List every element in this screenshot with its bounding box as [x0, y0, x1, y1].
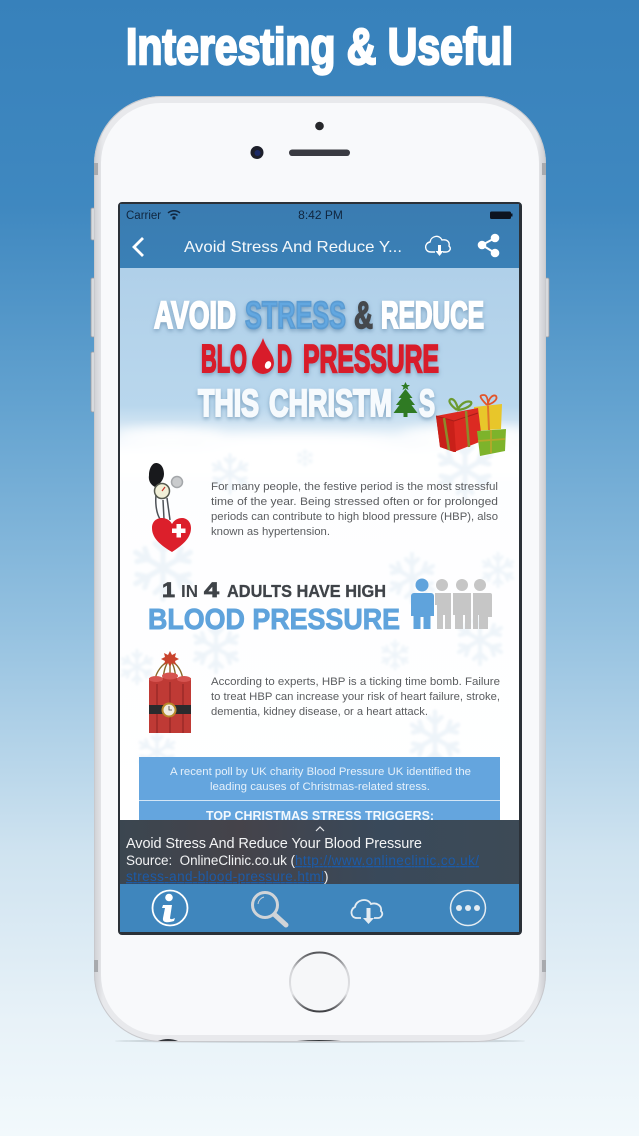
icon: share: [478, 234, 499, 257]
poll description: [170, 766, 471, 793]
home button: [290, 952, 349, 1012]
poll description: A recent poll by UK charity Blood Pressure UK identified the: [170, 766, 471, 778]
panel: stress triggers: [139, 757, 500, 820]
screen: [110, 203, 540, 934]
statistic: blood pressure: BLOOD PRESSURE: [148, 604, 400, 636]
heading: this christmas: S: [419, 383, 435, 425]
navigation title: Avoid Stress And Reduce Y...: [184, 239, 402, 256]
blood drop highlight: [264, 361, 272, 369]
carrier label: Carrier: [126, 210, 161, 222]
second paragraph: dementia, kidney disease, or a heart attack.: [211, 706, 428, 718]
phone: [91, 96, 549, 1043]
intro paragraph: [211, 481, 498, 538]
heading: this christmas: CHRISTM: [269, 383, 392, 425]
icon: info: [152, 890, 188, 926]
heading: blood pressure: BLO: [201, 338, 247, 381]
caption overlay: [120, 820, 519, 884]
intro paragraph: For many people, the festive period is the most stressful: [211, 481, 498, 493]
statistic: 1 in 4 adults: ADULTS HAVE HIGH: [227, 581, 386, 601]
icon: more: [450, 890, 486, 926]
caption title: Avoid Stress And Reduce Your Blood Pressure: [126, 836, 422, 852]
heading: avoid stress and reduce: &: [354, 295, 373, 337]
icon: gift boxes: [436, 395, 506, 456]
heading: this christmas: [196, 388, 437, 422]
caption source: stress-and-blood-pressure.html: [126, 869, 324, 884]
icon: dynamite: [149, 651, 191, 733]
icon: expand chevron: [316, 827, 324, 831]
caption source: Source: OnlineClinic.co.uk (: [126, 853, 296, 868]
statistic: 1 in 4 adults: 4: [204, 579, 219, 602]
icon: people 1 of 4: [411, 578, 492, 629]
front camera: [250, 146, 264, 159]
icon: back chevron: [134, 238, 143, 256]
side buttons: [91, 208, 549, 412]
intro paragraph: periods can contribute to high blood pressure (HBP), also: [211, 511, 498, 523]
heading: avoid stress and reduce: [152, 300, 486, 334]
icon: cloud download: [426, 236, 450, 256]
status and navigation bar: [120, 204, 519, 268]
triggers heading: TOP CHRISTMAS STRESS TRIGGERS:: [206, 808, 434, 823]
sensor: [315, 122, 324, 130]
snowflakes: [122, 441, 513, 771]
icon: download: [351, 900, 382, 924]
heading: blood pressure: [201, 338, 439, 381]
statistic: 1 in 4 adults: IN: [181, 581, 198, 601]
caption source: [126, 853, 479, 884]
heading: blood pressure: PRESSURE: [303, 338, 439, 381]
heading: blood pressure: D: [277, 338, 292, 381]
infographic image: [110, 268, 540, 827]
poll description: leading causes of Christmas-related stress.: [210, 781, 430, 793]
speaker: [289, 150, 350, 156]
clock: 8:42 PM: [298, 208, 343, 222]
heading: avoid stress and reduce: REDUCE: [381, 295, 484, 337]
heading: avoid stress and reduce: AVOID: [154, 295, 236, 337]
icon: heart with blood pressure gauge: [149, 463, 191, 552]
caption source: http://www.onlineclinic.co.uk/: [295, 853, 479, 868]
bottom toolbar: [120, 884, 519, 932]
title: Interesting & Useful: [126, 18, 513, 75]
icon: christmas tree: [394, 382, 418, 417]
phone body: [94, 96, 546, 1042]
icon: wifi: [168, 211, 180, 219]
icon: search: [252, 892, 286, 925]
heading: this christmas: THIS: [198, 383, 259, 425]
second paragraph: to treat HBP can increase your risk of heart failure, stroke,: [211, 691, 500, 703]
snow cloud: [120, 422, 519, 450]
caption source: ): [324, 869, 328, 884]
second paragraph: [211, 676, 500, 718]
icon: battery: [490, 212, 512, 219]
intro paragraph: known as hypertension.: [211, 526, 330, 538]
statistic: 1 in 4 adults: 1: [162, 579, 175, 602]
heading: avoid stress and reduce: STRESS: [245, 295, 346, 337]
phone shadow: [115, 1039, 525, 1043]
statistic: 1 in 4 adults: [163, 582, 386, 598]
intro paragraph: time of the year. Being stressed often or for prolonged: [211, 496, 498, 508]
second paragraph: According to experts, HBP is a ticking time bomb. Failure: [211, 676, 500, 688]
